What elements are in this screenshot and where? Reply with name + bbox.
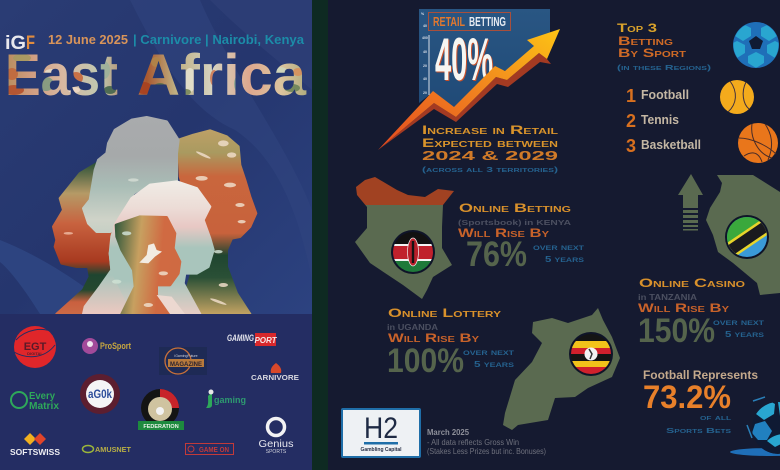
text: online casino Tanzania: Will Rise By [638,301,730,315]
title: Africa [137,43,307,108]
logo: Carnivore [251,363,299,382]
logo: Genius Sports [258,418,294,455]
logo: Softswiss: SOFTSWISS [10,447,60,457]
text: online lottery Uganda [387,306,514,380]
logo: Amusnet [82,446,132,454]
axis: % [421,12,425,16]
text: online betting Kenya: over next [533,243,584,252]
chart panel [419,9,550,108]
flag: Kenya [391,230,435,274]
logo: iGaming Afrika [206,390,246,408]
text: data notes: March 2025 [427,428,470,437]
event date and venue [5,33,305,54]
text: online betting Kenya: Will Rise By [458,226,550,240]
text: online casino Tanzania [638,276,764,350]
axis: 20 [423,91,427,95]
text: online betting Kenya: 76% [466,235,527,274]
heading: top 3 betting by sport: Betting [618,34,673,48]
label: retail betting: BETTING [469,14,506,29]
logo: EveryMatrix: Every [29,391,55,402]
logo: EGT Digital: EGT [24,341,47,353]
heading: top 3 betting by sport: Top 3 [617,21,657,35]
text: online lottery Uganda: 5 years [474,360,514,369]
text: online lottery Uganda: Online Lottery [388,306,502,320]
text: online betting Kenya: 5 years [545,255,584,264]
logo: Genius Sports: SPORTS [266,449,287,455]
text: data notes [427,428,546,456]
text: retail increase: Expected between [422,136,558,150]
logo: H2 Gambling Capital: Gambling Capital [360,447,402,453]
arrow: upward trend [678,174,703,230]
logo: aG0k [80,374,120,414]
flag: Tanzania [725,215,769,259]
logo: H2 Gambling Capital: H2 [364,412,398,445]
illustration: silhouettes [53,117,256,314]
event date and venue: F [26,33,35,54]
logo: aG0k: aG0k [88,387,112,401]
chart: retail betting growth: 40% [436,27,494,94]
logo: ProSport [82,338,131,354]
text: online lottery Uganda: over next [463,348,514,357]
ranked sports list [626,86,701,156]
chart: retail betting growth [378,9,560,150]
text: data notes: - All data reflects Gross Win [427,438,519,447]
callout: football share of bets: Sports Bets [666,426,732,435]
panel: event poster [0,0,312,470]
logo: ProSport: ProSport [100,341,131,351]
chart: retail betting growth: 40% [435,26,493,93]
text: online casino Tanzania: over next [713,318,764,327]
logo: Gaming Port: GAMING [227,333,254,343]
logo: EveryMatrix: Matrix [29,401,59,412]
text: online casino Tanzania: in TANZANIA [638,293,697,302]
logo: Football Kenya Federation: FEDERATION [143,424,179,430]
title [5,43,307,108]
logo: Gaming Port [227,333,278,346]
heading: top 3 betting by sport [617,21,711,72]
heading: top 3 betting by sport: (in these Regions) [617,65,711,72]
logo: EGT Digital [14,326,56,368]
label: retail betting [428,12,510,30]
text: data notes: (Stakes Less Prizes but inc. Bonuses) [427,447,546,456]
text: online casino Tanzania: Online Casino [639,276,745,290]
text: retail increase: (across all 3 territories) [422,167,558,174]
ranked sports list: Football [641,88,689,102]
text: online betting Kenya [458,201,584,274]
logo: Carnivore: CARNIVORE [251,375,299,382]
axis: 40 [423,50,427,54]
ranked sports list: 2 [626,111,636,131]
heading: top 3 betting by sport: By Sport [618,46,686,60]
dove [139,243,162,263]
logo: Genius Sports: Genius [258,439,294,450]
ranked sports list: Basketball [641,138,701,152]
text: retail increase [422,123,558,174]
logo: Amusnet: AMUSNET [95,447,132,454]
event date and venue: iG [5,33,26,54]
text: retail increase: Increase in Retail [422,123,558,137]
logo: Gaming Port: PORT [254,336,278,345]
icon: football [729,22,780,68]
text: online lottery Uganda: 100% [387,342,464,380]
text: online casino Tanzania: 150% [638,312,715,350]
event date and venue: 12 June 2025 [48,33,128,47]
flag: Uganda [569,332,613,376]
ranked sports list: Tennis [641,113,679,127]
logo: Football Kenya Federation [138,389,184,430]
icon: basketball [738,123,778,163]
logo: magazine: MAGAZINE [170,362,202,368]
event date and venue: | Carnivore | Nairobi, Kenya [133,33,305,47]
logo: Softswiss [10,433,60,457]
axis: 20 [423,64,427,68]
map: Kenya [355,177,454,299]
ranked sports list: 1 [626,86,636,106]
title: East [5,43,118,108]
ranked sports list: 3 [626,136,636,156]
logo: magazine: iGamingFuture [174,354,198,358]
callout: football share of bets: of all [700,413,731,422]
callout: football share of bets: Football Represents [643,368,758,382]
rising arrow [378,29,560,150]
text: online lottery Uganda: in UGANDA [387,323,438,332]
text: online betting Kenya: Online Betting [459,201,571,215]
axis: 40 [423,77,427,81]
text: online lottery Uganda: Will Rise By [388,331,480,345]
logo: EGT Digital: DIGITAL [27,351,43,356]
map: Tanzania [706,175,780,295]
callout: football share of bets [643,368,758,435]
label: retail betting: RETAIL [433,14,465,29]
axis: 40 [423,24,427,28]
text: retail increase: 2024 & 2029 [422,148,558,163]
logo: H2 Gambling Capital [342,409,420,457]
logo: Game On: GAME ON [199,447,229,454]
logo: EveryMatrix [11,391,59,412]
logo: magazine [159,347,207,375]
text: online casino Tanzania: 5 years [725,330,764,339]
axis [421,12,430,95]
icon: tennis ball [720,80,754,114]
icon: football with shadow [730,397,780,456]
callout: football share of bets: 73.2% [643,379,731,415]
logo: Game On [186,444,234,454]
gutter between panels [312,0,328,470]
axis: 400 [422,36,428,40]
map: Uganda [503,308,620,430]
text: online betting Kenya: (Sportsbook) in KENYA [458,220,571,227]
logo: iGaming Afrika: gaming [214,395,246,406]
value: 40 percent [435,26,494,94]
